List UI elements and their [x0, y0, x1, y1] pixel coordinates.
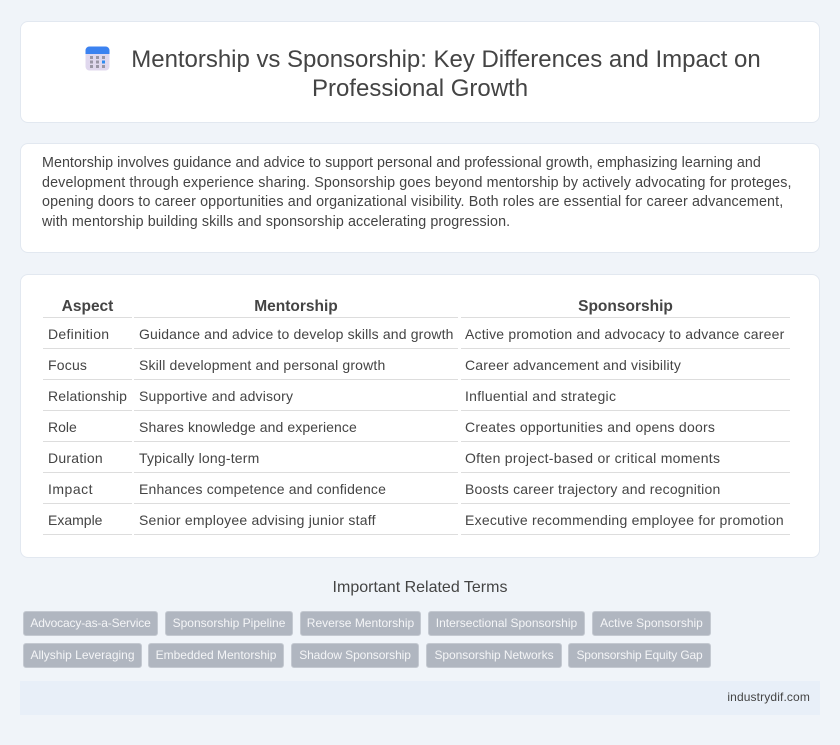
row: Example: Senior employee advising junior staff: [139, 512, 376, 528]
table header: Mentorship: [254, 298, 338, 315]
row: Duration: Typically long-term: [139, 450, 260, 466]
row: Impact: Impact: [48, 481, 93, 497]
table header: Sponsorship: [578, 298, 673, 315]
icon: calendar: [86, 46, 110, 70]
tag: [23, 611, 158, 636]
tag: [148, 643, 284, 668]
panel: comparison table: [20, 274, 820, 558]
row: Relationship: Supportive and advisory: [139, 388, 293, 404]
row: Focus: [48, 357, 681, 373]
tag: [291, 643, 419, 668]
row: Role: Creates opportunities and opens doors: [465, 419, 715, 435]
intro paragraph: Mentorship involves guidance and advice to support personal and professional growth, emphasizing learning and: [42, 155, 761, 171]
panel: intro text: [20, 143, 820, 253]
row: Focus: Career advancement and visibility: [465, 357, 681, 373]
tag: [300, 611, 421, 636]
row: Example: Example: [48, 512, 102, 528]
table header: Aspect: [62, 298, 113, 315]
row: Duration: [48, 450, 720, 466]
table header: [62, 298, 673, 315]
row: Impact: [48, 481, 720, 497]
row: Definition: [48, 326, 784, 342]
tag: [165, 611, 293, 636]
footer bar: [20, 681, 820, 715]
heading: related terms: Important Related Terms: [333, 579, 507, 596]
tag: Sponsorship Pipeline: [173, 616, 285, 630]
tag: [592, 611, 711, 636]
panel: header: [20, 21, 820, 123]
tag: Active Sponsorship: [600, 616, 703, 630]
intro paragraph: [42, 155, 792, 230]
intro paragraph: with mentorship building skills and sponsorship accelerating progression.: [42, 214, 510, 230]
row: Relationship: [48, 388, 616, 404]
title: Professional Growth: [312, 75, 528, 102]
row: Relationship: Relationship: [48, 388, 127, 404]
row: Role: Shares knowledge and experience: [139, 419, 357, 435]
row: Example: [48, 512, 784, 528]
title: Mentorship vs Sponsorship: Key Differences and Impact on: [131, 46, 761, 73]
tag: [428, 611, 585, 636]
tag: Intersectional Sponsorship: [436, 616, 577, 630]
row: Impact: Boosts career trajectory and recognition: [465, 481, 720, 497]
row: Duration: Often project-based or critical moments: [465, 450, 720, 466]
row: Example: Executive recommending employee for promotion: [465, 512, 784, 528]
tag: [568, 643, 711, 668]
tag: Shadow Sponsorship: [299, 648, 411, 662]
row: Duration: Duration: [48, 450, 103, 466]
intro paragraph: development through experience sharing. Sponsorship goes beyond mentorship by actively advocating for proteges,: [42, 174, 792, 190]
row: Definition: Definition: [48, 326, 109, 342]
title: [131, 46, 761, 102]
tag: Reverse Mentorship: [307, 616, 414, 630]
related term tags: [23, 611, 711, 668]
row: Impact: Enhances competence and confidence: [139, 481, 386, 497]
row: Definition: Active promotion and advocacy to advance career: [465, 326, 784, 342]
tag: Advocacy-as-a-Service: [30, 616, 151, 630]
row: Focus: Skill development and personal growth: [139, 357, 385, 373]
row: Definition: Guidance and advice to develop skills and growth: [139, 326, 454, 342]
tag: Sponsorship Networks: [434, 648, 554, 662]
row: Focus: Focus: [48, 357, 87, 373]
row: Role: Role: [48, 419, 77, 435]
tag: [23, 643, 142, 668]
row: Role: [48, 419, 715, 435]
tag: Sponsorship Equity Gap: [576, 648, 703, 662]
tag: [426, 643, 562, 668]
tag: Allyship Leveraging: [30, 648, 135, 662]
footer text: industrydif.com: [727, 690, 810, 704]
tag: Embedded Mentorship: [156, 648, 276, 662]
intro paragraph: opening doors to career opportunities and organizational visibility. Both roles are essential for career advancement,: [42, 194, 783, 210]
row: Relationship: Influential and strategic: [465, 388, 616, 404]
